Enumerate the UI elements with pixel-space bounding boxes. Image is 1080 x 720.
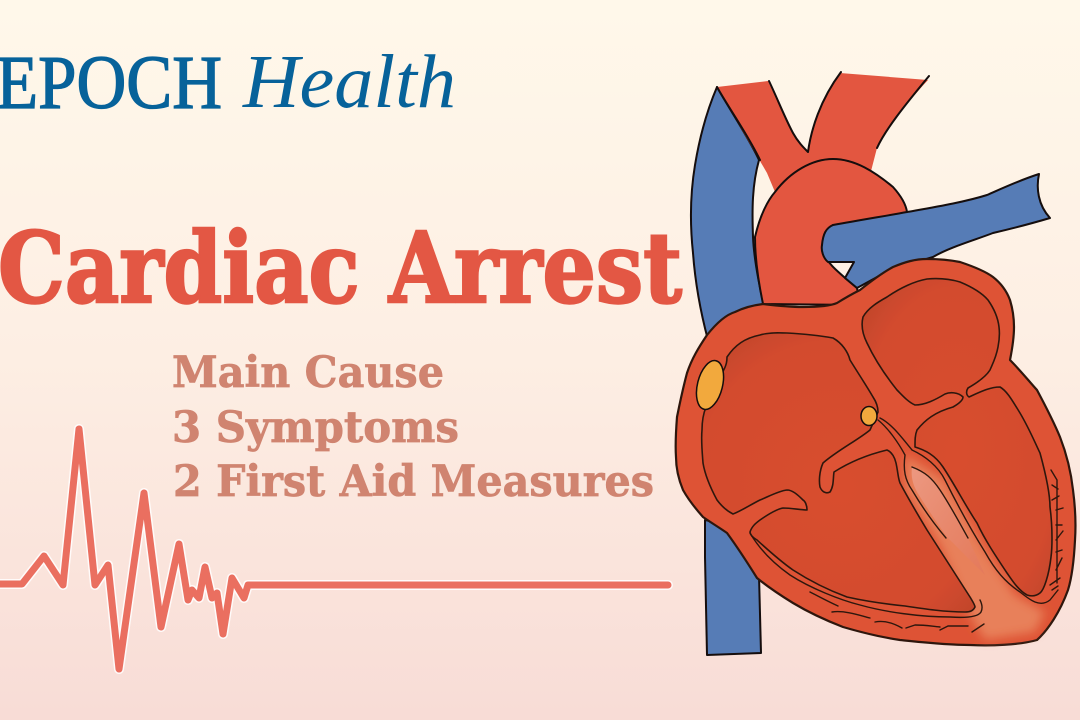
septum lighter band	[905, 455, 1045, 640]
left atrium and ventricle chamber	[862, 279, 1052, 596]
SA node	[692, 358, 728, 412]
heart illustration	[676, 72, 1075, 655]
logo: Epoch Health: Health	[242, 40, 456, 124]
subtitle list: 2 First Aid Measures	[173, 457, 654, 507]
inferior vena cava	[705, 520, 761, 655]
AV node	[861, 406, 877, 426]
ECG heartbeat line	[0, 429, 668, 669]
inner septum highlight	[912, 467, 985, 575]
subtitle list: Main Cause	[172, 348, 444, 398]
pulmonary artery	[822, 174, 1050, 288]
logo: Epoch Health	[0, 40, 456, 125]
subtitle list	[172, 348, 654, 507]
aortic arch	[755, 159, 907, 305]
subtitle list: 3 Symptoms	[172, 403, 459, 453]
logo: Epoch Health: EPOCH	[0, 41, 222, 125]
heart muscle outer wall	[676, 259, 1075, 645]
aortic branches	[717, 73, 928, 192]
title: Cardiac Arrest	[0, 211, 682, 325]
conduction pathway	[750, 418, 1063, 632]
right atrium and ventricle chamber	[702, 333, 975, 612]
superior vena cava	[691, 87, 765, 340]
